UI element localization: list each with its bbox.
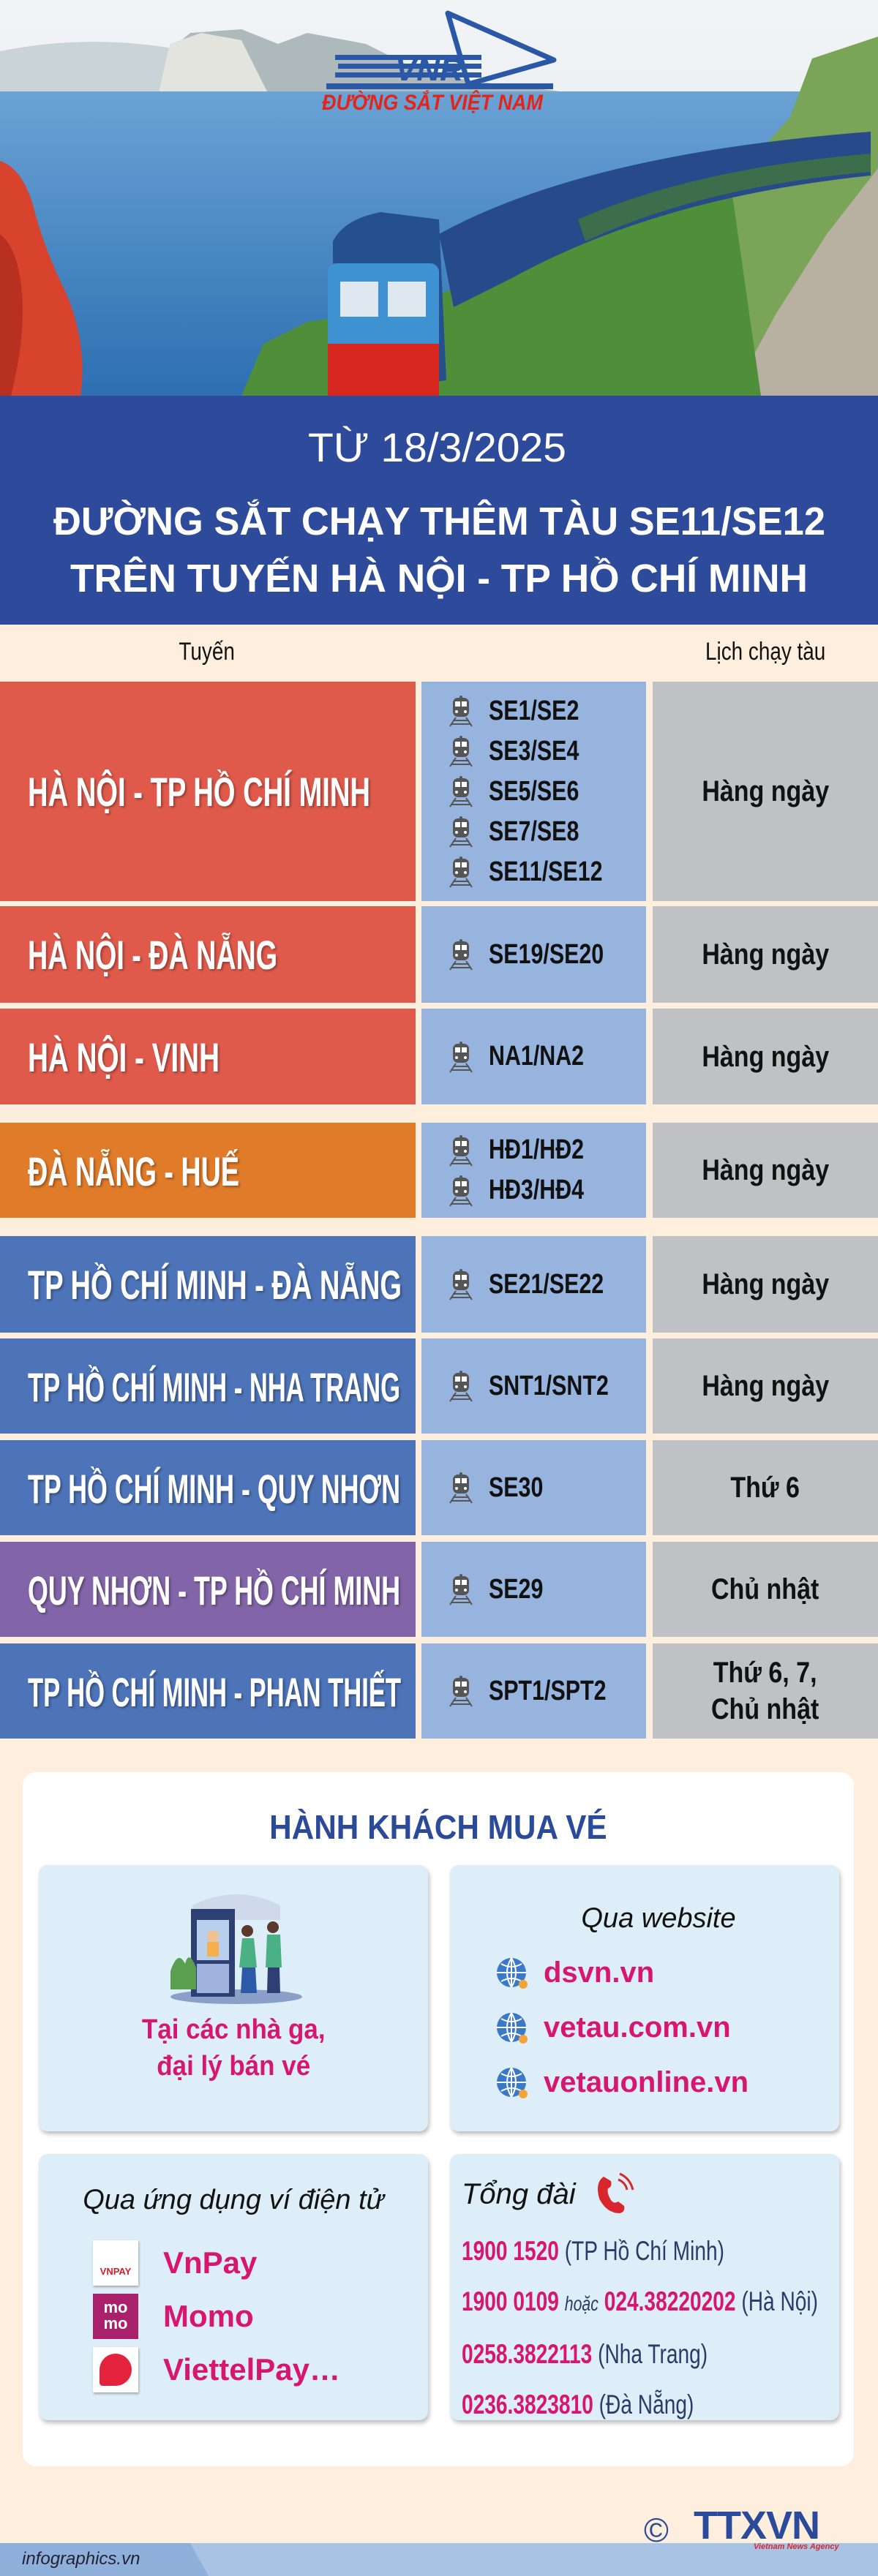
row: Hà Nội - Vinh: NA1/NA2 [489,1041,584,1072]
card: stations [39,1865,428,2131]
label: hotline with phone icon: Tổng đài [462,2178,576,2210]
list: phone numbers: 0258.3822113 (Nha Trang) [462,2339,708,2369]
row: Hà Nội - TP HCM: Hàng ngày [702,775,829,807]
row: TP HCM - Nha Trang [0,1338,878,1434]
logo: VNR: VNR [395,52,463,88]
row: Hà Nội - Đà Nẵng: Hàng ngày [702,938,829,971]
label: via e-wallet apps: Qua ứng dụng ví điện tử [83,2185,384,2215]
text: at stations: Tại các nhà ga, [142,2014,325,2045]
row: TP HCM - Phan Thiết: Thứ 6, 7, [713,1657,817,1689]
row: TP HCM - Quy Nhơn [0,1440,878,1535]
main title: ĐƯỜNG SẮT CHẠY THÊM TÀU SE11/SE12 [53,499,825,543]
table header: Lịch chạy tàu [705,638,825,666]
row: Đà Nẵng - Huế: Hàng ngày [702,1154,829,1186]
footer strip [0,2543,878,2576]
panel: passengers buy tickets [23,1772,854,2466]
row: Hà Nội - TP HCM: SE1/SE2 [489,695,579,726]
row: Hà Nội - TP HCM: SE3/SE4 [489,736,579,767]
row: Hà Nội - Vinh: Hàng ngày [702,1040,829,1072]
row: Hà Nội - Đà Nẵng [0,906,878,1003]
table header: Tuyến [179,638,235,666]
row: TP HCM - Phan Thiết [0,1643,878,1739]
logo: VNR: ĐƯỜNG SẮT VIỆT NAM [322,90,544,115]
row: Hà Nội - TP HCM: SE11/SE12 [489,856,603,886]
logo: VNR [322,13,554,115]
list: wallets: Momo [163,2298,254,2333]
list: websites: vetau.com.vn [544,2011,731,2044]
label: hotline with phone icon [462,2172,634,2213]
footer: website [0,2543,209,2576]
list: websites: vetauonline.vn [544,2066,748,2098]
list: wallets: ViettelPay… [163,2352,340,2386]
row: Đà Nẵng - Huế: HĐ1/HĐ2 [489,1134,584,1165]
list: wallets [92,2240,340,2395]
panel heading: HÀNH KHÁCH MUA VÉ [269,1808,607,1846]
card: websites [450,1865,839,2131]
list: wallets: mo [104,2314,127,2332]
row: TP HCM - Đà Nẵng [0,1236,878,1333]
table header [179,638,825,666]
row: Hà Nội - TP HCM [0,682,878,901]
list: phone numbers [462,2236,818,2419]
row: TP HCM - Phan Thiết: SPT1/SPT2 [489,1675,607,1706]
row: TP HCM - Đà Nẵng: SE21/SE22 [489,1268,604,1299]
logo: TTXVN: TTXVN [694,2504,819,2547]
footer: website: infographics.vn [22,2549,140,2569]
text: at stations: đại lý bán vé [157,2051,310,2082]
row: Hà Nội - TP HCM: SE5/SE6 [489,775,579,806]
card: e-wallets [39,2154,428,2420]
title band [0,396,878,625]
row: TP HCM - Quy Nhơn: SE30 [489,1472,543,1502]
date heading: TỪ 18/3/2025 [308,424,566,470]
list: phone numbers: 1900 1520 (TP Hồ Chí Minh) [462,2236,724,2266]
list: wallets: VNPAY [100,2266,131,2276]
row: Hà Nội - TP HCM: SE7/SE8 [489,816,579,847]
row: Hà Nội - Vinh: HÀ NỘI - VINH [28,1034,220,1080]
text: at stations [142,2014,325,2082]
logo: TTXVN [644,2504,839,2551]
list: wallets: mo [104,2298,127,2316]
row: TP HCM - Nha Trang: Hàng ngày [702,1370,829,1402]
row: Đà Nẵng - Huế: ĐÀ NẴNG - HUẾ [28,1148,239,1194]
list: wallets: VnPay [163,2245,257,2279]
card: hotlines [450,2154,839,2420]
logo: TTXVN: © [644,2511,669,2549]
header photo [0,0,878,396]
list: websites [497,1957,748,2098]
row: Quy Nhơn - TP HCM [0,1542,878,1637]
row: Hà Nội - Đà Nẵng: SE19/SE20 [489,939,604,970]
row: Hà Nội - Vinh [0,1009,878,1104]
row: Đà Nẵng - Huế: HĐ3/HĐ4 [489,1175,584,1205]
row: TP HCM - Đà Nẵng: Hàng ngày [702,1268,829,1300]
main title: TRÊN TUYẾN HÀ NỘI - TP HỒ CHÍ MINH [70,556,808,600]
row: TP HCM - Phan Thiết: Chủ nhật [711,1693,819,1725]
row: TP HCM - Quy Nhơn: Thứ 6 [731,1472,800,1504]
row: Đà Nẵng - Huế [0,1123,878,1218]
row: TP HCM - Nha Trang: SNT1/SNT2 [489,1371,609,1401]
icon: ticket station illustration [170,1894,302,2004]
row: Hà Nội - Đà Nẵng: HÀ NỘI - ĐÀ NẴNG [28,932,277,978]
list: phone numbers: 1900 0109 hoặc 024.38220202 (Hà Nội) [462,2286,818,2316]
list: websites: dsvn.vn [544,1957,654,1989]
main title [53,499,825,600]
list: phone numbers: 0236.3823810 (Đà Nẵng) [462,2389,694,2419]
row: Quy Nhơn - TP HCM: SE29 [489,1574,543,1605]
logo: TTXVN: Vietnam News Agency [754,2542,839,2551]
label: via website: Qua website [581,1903,736,1934]
row: Quy Nhơn - TP HCM: Chủ nhật [711,1573,819,1605]
